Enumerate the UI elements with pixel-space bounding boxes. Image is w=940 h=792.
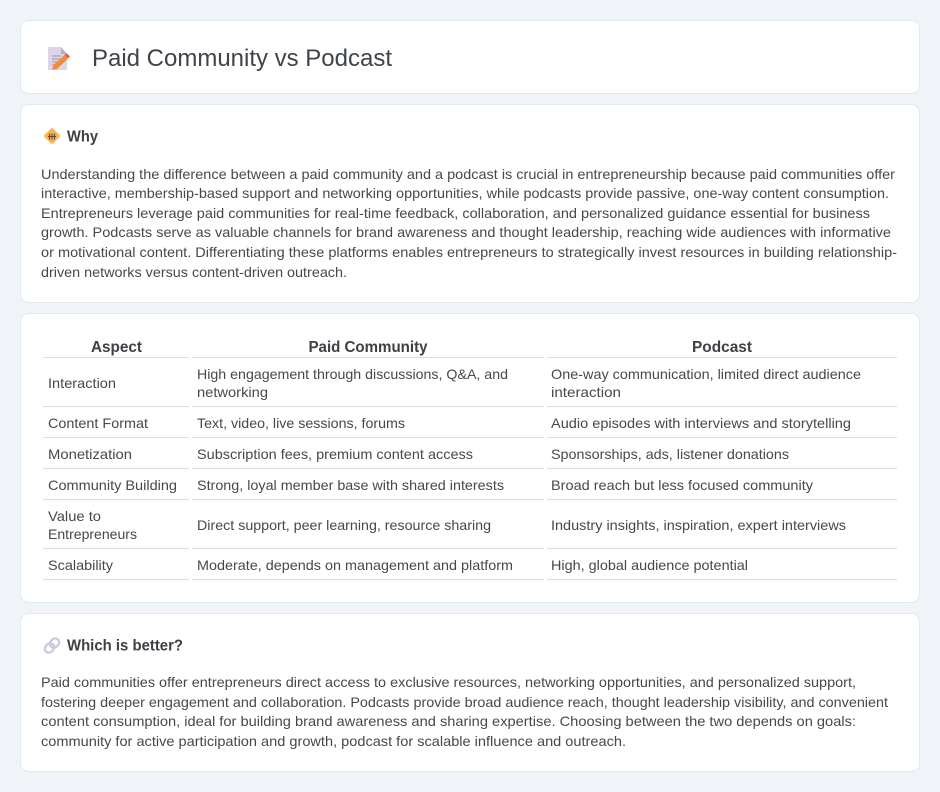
text: why paragraph: Entrepreneurs leverage paid communities for real-time feedback, collaboration, and personalized guidance essential for business [41,205,870,221]
row: scalability: High, global audience potential [551,557,748,573]
text: which is better paragraph: Paid communities offer entrepreneurs direct access to exclusive resources, networking opportunities, and personalized support, [41,674,856,690]
text: why paragraph: interactive, membership-based support and networking opportunities, while podcasts provide passive, one-way content consumption. [41,185,889,201]
row: interaction: interaction [551,384,621,400]
text: which is better paragraph: fostering deeper engagement and collaboration. Podcasts provide broad audience reach, thought leadership visibility, and convenient [41,694,888,710]
row: scalability: Scalability [48,557,113,573]
table header: Aspect [91,339,143,356]
table header [91,339,753,356]
text: which is better paragraph: content consumption, ideal for building brand awareness and sharing expertise. Choosing between the two depends on goals: [41,713,856,729]
text: which is better paragraph [41,674,888,749]
table header: Podcast [692,339,753,356]
panel: title card [20,20,920,94]
panel: comparison table [20,314,920,602]
row: community building [48,477,813,493]
text: why paragraph: driven networks versus content-driven outreach. [41,264,347,280]
row: content format: Content Format [48,415,148,431]
row: monetization: Sponsorships, ads, listener donations [551,446,789,462]
row: interaction: High engagement through discussions, Q&A, and [197,366,508,382]
text: why paragraph: Understanding the difference between a paid community and a podcast is crucial in entrepreneurship because paid communities offer [41,166,895,182]
row: community building: Community Building [48,477,177,493]
row: interaction: networking [197,384,268,400]
row: value to entrepreneurs: Direct support, peer learning, resource sharing [197,517,491,533]
row: community building: Strong, loyal member base with shared interests [197,477,504,493]
icon: chain link [43,637,61,654]
row: monetization: Subscription fees, premium content access [197,446,473,462]
row: value to entrepreneurs [48,508,846,542]
heading: why: Why [67,128,98,146]
row: scalability [48,557,748,573]
text: why paragraph: growth. Podcasts serve as valuable channels for brand awareness and thought leadership, reaching wide audiences with informative [41,224,891,240]
row: monetization: Monetization [48,446,132,462]
title: Paid Community vs Podcast [92,45,392,72]
row: value to entrepreneurs: Entrepreneurs [48,526,137,542]
icon: document with pencil [48,47,70,70]
icon: orange diamond [44,128,60,144]
panel: why [20,104,920,302]
row: scalability: Moderate, depends on management and platform [197,557,513,573]
row: value to entrepreneurs: Industry insights, inspiration, expert interviews [551,517,846,533]
row: interaction: One-way communication, limited direct audience [551,366,861,382]
text: why paragraph: or motivational content. Differentiating these platforms enables entrepreneurs to strategically invest resources in building relationship- [41,244,897,260]
panel: which is better [20,614,920,772]
row: content format [48,415,851,431]
row: interaction [48,366,861,400]
table header: Paid Community [308,339,428,356]
row: value to entrepreneurs: Value to [48,508,101,524]
heading: which is better: Which is better? [67,638,183,654]
row: interaction: Interaction [48,375,116,391]
row: monetization [48,446,789,462]
row: community building: Broad reach but less focused community [551,477,813,493]
text: which is better paragraph: community for active participation and growth, podcast for scalable influence and outreach. [41,733,626,749]
row: content format: Text, video, live sessions, forums [197,415,405,431]
text: why paragraph [41,166,897,280]
row: content format: Audio episodes with interviews and storytelling [551,415,851,431]
